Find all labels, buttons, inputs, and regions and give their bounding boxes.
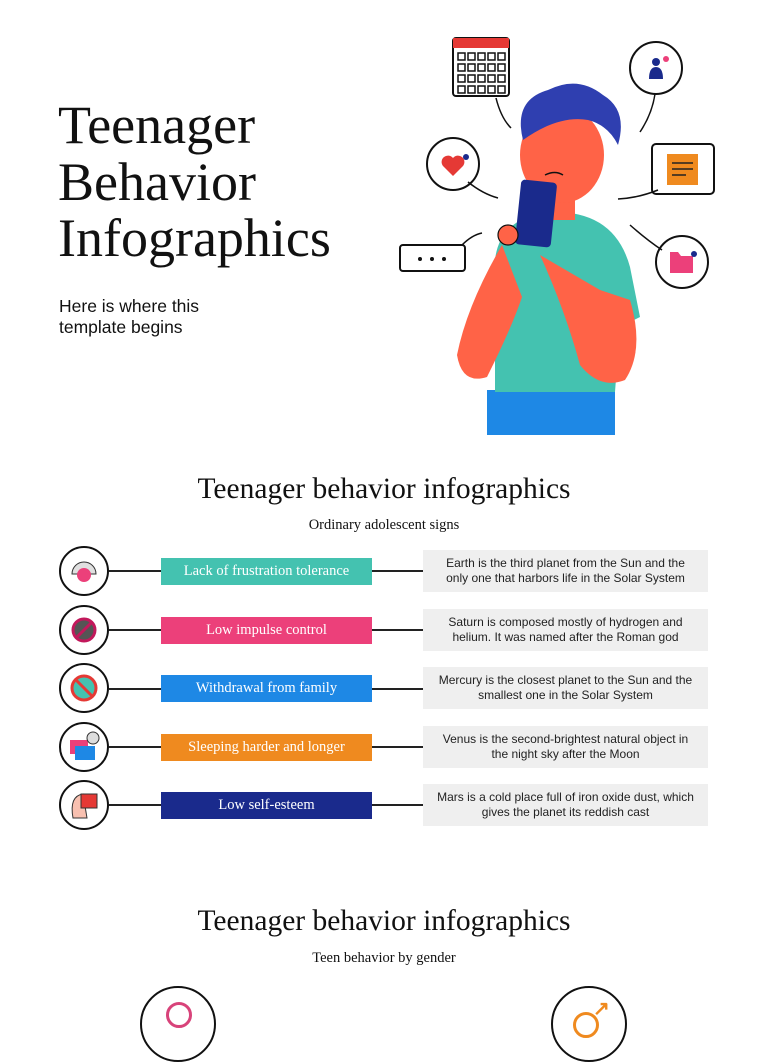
label: Low impulse control [206,622,327,638]
icon: pillows [59,722,109,772]
description: Mercury is the closest planet to the Sun and the smallest one in the Solar System [439,673,692,702]
subtitle [59,296,199,337]
icon: note bubble [618,144,714,199]
icon: calendar [453,38,511,128]
label: Withdrawal from family [196,680,337,696]
icon: male [551,986,627,1062]
label [161,792,372,819]
description [423,667,708,709]
label: Low self-esteem [218,797,315,813]
section heading 1: Teenager behavior infographics [197,473,571,505]
description [423,609,708,651]
icon: female [140,986,216,1062]
subtitle: Here is where this [59,296,199,316]
description: Saturn is composed mostly of hydrogen and helium. It was named after the Roman god [448,615,683,644]
row 4 [59,722,708,772]
description [423,784,708,826]
illustration: teenager with phone [399,37,715,435]
connector lines [109,570,423,806]
description: Mars is a cold place full of iron oxide dust, which gives the planet its reddish cast [437,790,694,819]
row 2 [59,605,708,655]
row 5 [59,780,708,830]
title: Teenager [58,95,255,155]
icon: no talk [59,663,109,713]
icon: self-esteem head [59,780,109,830]
description [423,550,708,592]
icon: person bubble [630,42,682,132]
icon: heart bubble [427,138,498,198]
label: Sleeping harder and longer [188,739,345,755]
icon: frustration gauge [59,546,109,596]
title [58,95,331,268]
description: Venus is the second-brightest natural object in the night sky after the Moon [443,732,688,761]
icon: male: ↗ [593,998,610,1020]
subtitle: template begins [59,317,183,337]
label [161,558,372,585]
row 3 [59,663,708,713]
icon: folder bubble [630,225,708,288]
title: Behavior [58,152,256,212]
label [161,617,372,644]
person [457,84,640,435]
description [423,726,708,768]
label: Lack of frustration tolerance [184,563,349,579]
section heading 2: Teenager behavior infographics [197,905,571,937]
section subheading 1: Ordinary adolescent signs [309,517,459,533]
label [161,675,372,702]
section subheading 2: Teen behavior by gender [312,950,456,966]
row 1 [59,546,708,596]
icon: dots bubble [400,233,482,271]
label [161,734,372,761]
title: Infographics [58,208,331,268]
description: Earth is the third planet from the Sun and the only one that harbors life in the Solar System [446,556,685,585]
icon: no impulse [59,605,109,655]
